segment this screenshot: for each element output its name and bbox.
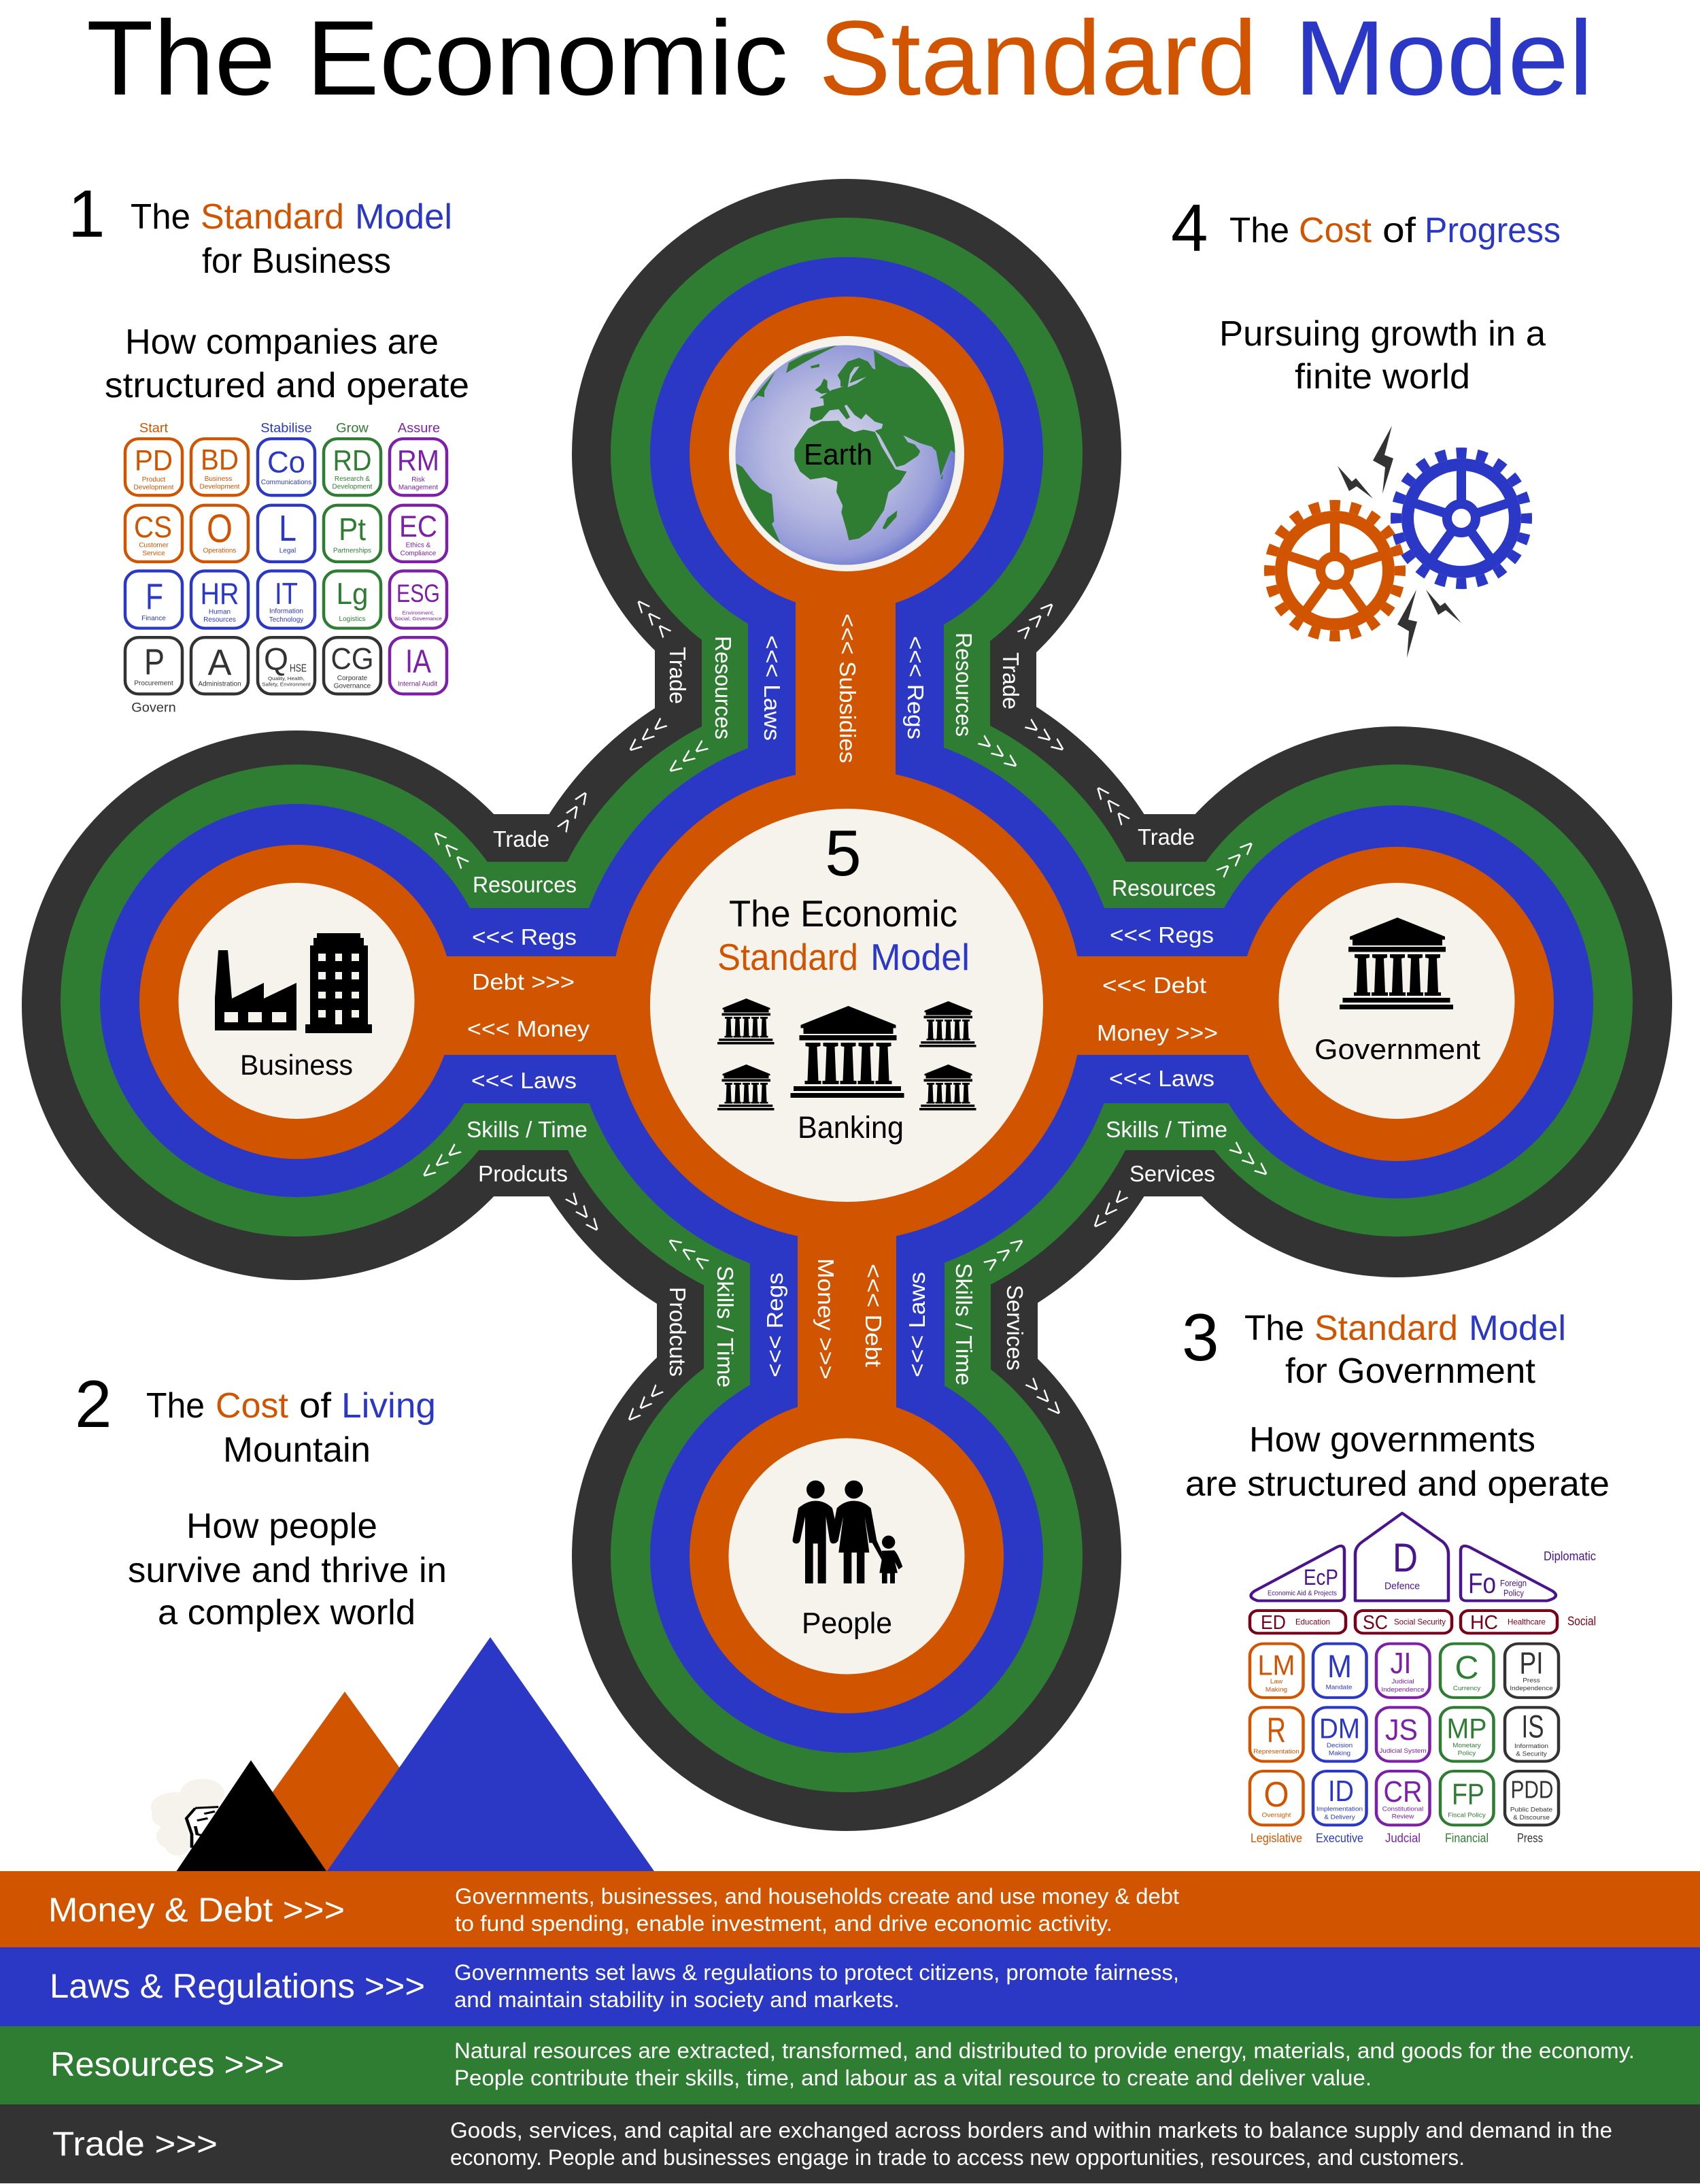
flow labels: right arm: Money >>> <box>1097 1020 1218 1045</box>
panel: business functions grid: A <box>208 641 232 683</box>
panel: government functions house: Financial <box>1445 1831 1489 1845</box>
flow labels: right arm: Skills / Time <box>1106 1117 1227 1142</box>
panel: business functions grid: Social, Governance <box>394 616 443 622</box>
section 2 heading: 2 <box>75 1366 112 1441</box>
node: Banking centre, section 5 <box>717 817 976 1145</box>
section 2 heading: Cost <box>216 1386 289 1426</box>
roof: economic aid <box>1251 1546 1344 1601</box>
icon: climber on cloud <box>151 1779 224 1855</box>
section 1 heading: The <box>131 197 190 237</box>
panel: government functions house: Law <box>1270 1679 1282 1685</box>
flow labels: right arm: >>> <box>1223 1135 1278 1187</box>
roof: defence <box>1355 1513 1448 1601</box>
section 2 heading: of <box>299 1386 332 1426</box>
panel: business functions grid: IA <box>405 643 431 679</box>
section 3 heading: for Government <box>1285 1351 1536 1391</box>
legend bar: trade: Goods, services, and capital are exchanged across borders and within markets to balance supply and demand in the <box>450 2118 1612 2143</box>
node: Earth globe: Earth <box>804 438 872 471</box>
panel: government functions house: Press <box>1523 1677 1540 1684</box>
flow labels: bottom arm: <<< Debt <box>861 1264 886 1367</box>
flow labels: top arm: >>> <box>1011 592 1064 645</box>
panel: government functions house: Legislative <box>1251 1831 1302 1845</box>
panel: business functions grid: Grow <box>336 421 369 435</box>
title <box>86 0 1593 118</box>
panel: business functions grid: Development <box>333 484 373 491</box>
node: Banking centre, section 5: Standard <box>717 936 858 978</box>
panel: business functions grid: O <box>207 507 233 551</box>
panel: business functions grid <box>125 421 447 715</box>
section 1 heading: structured and operate <box>105 366 469 405</box>
legend bar: laws and regulations: Laws & Regulations >>> <box>50 1967 425 2005</box>
section 4 heading: Pursuing growth in a <box>1219 314 1546 354</box>
panel: government functions house: Mandate <box>1326 1684 1352 1691</box>
icon: orange gear <box>1270 505 1400 636</box>
panel: business functions grid: Information <box>269 608 303 615</box>
panel: business functions grid: Logistics <box>339 616 366 623</box>
panel: government functions house: ID <box>1328 1775 1354 1808</box>
node: Government <box>1314 918 1480 1065</box>
panel: government functions house: Currency <box>1453 1685 1481 1692</box>
section 3 heading: are structured and operate <box>1185 1464 1610 1504</box>
panel: business functions grid: Technology <box>269 616 303 624</box>
flow labels: bottom arm: <<< Regs <box>762 1273 787 1377</box>
panel: government functions house: & Security <box>1516 1751 1547 1758</box>
node: Business <box>215 933 372 1081</box>
flow labels: top arm: Trade <box>998 652 1023 709</box>
legend bar: money and debt: Governments, businesses, and households create and use money & debt <box>455 1884 1179 1909</box>
panel: business functions grid: Customer <box>139 542 169 550</box>
flow labels: left arm: Trade <box>493 826 549 852</box>
panel: government functions house: Constitutional <box>1382 1806 1423 1813</box>
section 4 heading <box>1171 190 1561 397</box>
panel: government functions house: & Delivery <box>1324 1814 1355 1821</box>
panel: business functions grid: Communications <box>261 479 311 486</box>
roof: foreign policy <box>1461 1546 1556 1601</box>
section 1 heading: How companies are <box>125 322 439 362</box>
panel: business functions grid: RD <box>333 445 372 477</box>
social row: SC <box>1363 1611 1388 1634</box>
panel: government functions house: Judcial <box>1385 1831 1421 1845</box>
panel: business functions grid: PD <box>135 445 173 477</box>
social row: ED <box>1261 1611 1286 1634</box>
flow labels: left arm: Prodcuts <box>478 1161 568 1186</box>
roof: foreign policy: Fo <box>1468 1568 1496 1599</box>
node: Banking centre, section 5: 5 <box>825 817 862 890</box>
social row: Healthcare <box>1508 1617 1546 1627</box>
panel: business functions grid: F <box>146 575 163 617</box>
flow labels: bottom arm: <<< Laws <box>904 1272 930 1377</box>
panel: government functions house: & Discourse <box>1513 1815 1550 1821</box>
flow labels: left arm: <<< <box>415 1136 469 1186</box>
icon: factory <box>215 950 296 1030</box>
title: The Economic <box>86 0 788 118</box>
panel: business functions grid: ESG <box>396 579 440 607</box>
flow labels: left arm <box>415 783 609 1241</box>
flow labels: right arm: <<< <box>1085 1183 1136 1236</box>
flow labels: right arm: <<< Laws <box>1109 1066 1214 1091</box>
panel: business functions grid: Management <box>398 484 438 492</box>
flow labels: left arm: >>> <box>551 783 598 837</box>
flow labels: top arm: <<< Laws <box>760 635 785 741</box>
section 3 heading: The <box>1244 1309 1304 1348</box>
panel: business functions grid: Partnerships <box>333 548 371 554</box>
section 2 heading: a complex world <box>158 1593 415 1632</box>
section 2 heading: How people <box>186 1507 377 1546</box>
panel: business functions grid: Risk <box>411 476 425 484</box>
section 4 heading: 4 <box>1171 190 1208 265</box>
flow labels: left arm: >>> <box>559 1187 609 1241</box>
section 2 heading <box>75 1366 447 1632</box>
panel: business functions grid: CS <box>134 510 172 544</box>
panel: government functions house: Oversight <box>1262 1812 1291 1819</box>
flow labels: top arm: Resources <box>711 636 736 739</box>
panel: business functions grid: Internal Audit <box>398 681 437 688</box>
node: Government: Government <box>1314 1033 1480 1065</box>
title: Standard <box>819 0 1257 118</box>
section 4 heading: Cost <box>1299 211 1372 250</box>
panel: government functions house: FP <box>1452 1778 1484 1811</box>
flow labels: right arm <box>1085 779 1278 1236</box>
flow labels: top arm: >>> <box>972 728 1027 779</box>
section 1 heading: 1 <box>68 176 105 251</box>
flow labels: top arm: Resources <box>951 633 976 737</box>
panel: government functions house: Press <box>1517 1831 1543 1845</box>
panel: business functions grid: RM <box>397 445 439 477</box>
panel: business functions grid: Service <box>142 550 165 557</box>
flow labels: left arm: <<< Money <box>467 1016 590 1041</box>
icon: family <box>793 1481 902 1583</box>
panel: business functions grid: Research & <box>335 475 371 483</box>
panel: business functions grid: Business <box>205 475 232 483</box>
panel: business functions grid: CG <box>330 641 373 675</box>
diagram: cream node centres <box>178 336 1515 1675</box>
panel: government functions house: LM <box>1257 1650 1295 1681</box>
legend bar: trade <box>0 2104 1700 2183</box>
section 1 heading: for Business <box>202 241 391 281</box>
icon: sparks <box>1338 426 1461 658</box>
panel: government functions house: PI <box>1519 1647 1544 1681</box>
panel: government functions house: Review <box>1392 1813 1414 1820</box>
section 3 heading: How governments <box>1249 1420 1535 1460</box>
section 4 heading: The <box>1229 211 1289 250</box>
section 3 heading <box>1182 1300 1610 1504</box>
section 1 heading: Standard <box>201 197 344 237</box>
legend bar: laws and regulations <box>0 1947 1700 2026</box>
flow labels: top arm: <<< <box>628 592 679 645</box>
panel: business functions grid: Governance <box>334 683 371 690</box>
roof: economic aid: Economic Aid & Projects <box>1268 1590 1337 1597</box>
panel: government functions house: Judicial <box>1391 1679 1414 1685</box>
flow labels: right arm: >>> <box>1210 831 1263 884</box>
node: Business: Business <box>240 1049 353 1081</box>
panel: government functions house: PDD <box>1511 1777 1553 1804</box>
panel: business functions grid: Corporate <box>337 675 368 682</box>
title: Model <box>1294 0 1593 118</box>
icon: bank buildings <box>717 998 976 1110</box>
section 4 heading: finite world <box>1295 357 1470 397</box>
panel: business functions grid: Human <box>209 608 231 616</box>
panel: business functions grid: P <box>144 641 165 682</box>
panel: business functions grid: EC <box>399 509 437 543</box>
flow labels: left arm: <<< <box>425 824 477 877</box>
panel: business functions grid: Quality, Health, <box>268 675 305 682</box>
diagram: resources ring layer <box>61 218 1633 1792</box>
panel: government functions house: Representation <box>1253 1748 1299 1755</box>
panel: government functions house: JS <box>1385 1713 1418 1747</box>
node: Banking centre, section 5: The Economic <box>729 892 957 935</box>
panel: business functions grid: Legal <box>279 548 296 554</box>
flow labels: top arm: <<< Subsidies <box>835 614 860 763</box>
panel: government functions house: C <box>1455 1648 1478 1685</box>
panel: business functions grid: Govern <box>131 701 176 715</box>
icon: office building <box>305 933 372 1033</box>
legend bar: money and debt: Money & Debt >>> <box>48 1891 345 1929</box>
flow labels: bottom arm: <<< <box>619 1377 672 1430</box>
legend bar: trade: Trade >>> <box>52 2125 218 2163</box>
flow labels: top arm: <<< <box>662 732 716 782</box>
section 3 heading: Model <box>1469 1309 1566 1348</box>
panel: business functions grid: BD <box>201 444 239 476</box>
flow labels: bottom arm: Money >>> <box>813 1258 838 1379</box>
legend bar: trade: economy. People and businesses engage in trade to access new opportunities, resources, and customers. <box>450 2145 1465 2170</box>
panel: business functions grid: IT <box>275 577 298 611</box>
flow labels: top arm: <<< Regs <box>903 636 928 739</box>
flow labels: bottom arm <box>619 1228 1071 1430</box>
panel: government functions house: Judicial System <box>1379 1747 1427 1755</box>
section 2 heading: Mountain <box>223 1430 371 1470</box>
panel: business functions grid: L <box>279 507 296 549</box>
panel: business functions grid: HSE <box>290 663 307 674</box>
node: People <box>793 1481 902 1640</box>
panel: government functions house: M <box>1327 1649 1352 1685</box>
panel: government functions house: MP <box>1447 1713 1487 1745</box>
panel: government functions house: Information <box>1514 1743 1548 1750</box>
flow labels: left arm: Resources <box>473 872 577 897</box>
panel: business functions grid: Start <box>139 421 169 435</box>
panel: government functions house: Policy <box>1458 1750 1476 1757</box>
panel: business functions grid: Ethics & <box>406 542 431 550</box>
section 4 heading: of <box>1382 211 1416 250</box>
icon: blue gear <box>1396 453 1527 584</box>
legend bar: resources: People contribute their skills, time, and labour as a vital resource to create and deliver value. <box>454 2066 1372 2090</box>
panel: business functions grid: Pt <box>339 512 366 548</box>
panel: business functions grid: Co <box>267 445 305 479</box>
flow labels: top arm: <<< <box>621 709 675 761</box>
roof: foreign policy: Policy <box>1503 1588 1524 1598</box>
legend bar: resources: Resources >>> <box>50 2045 284 2083</box>
node: Earth globe <box>736 346 955 565</box>
section 2 heading: Living <box>341 1386 436 1426</box>
chart: cost of living mountains <box>151 1637 654 1871</box>
panel: business functions grid: Procurement <box>134 680 173 688</box>
flow labels: right arm: <<< <box>1087 779 1138 833</box>
panel: business functions grid: Compliance <box>401 550 437 557</box>
panel: business functions grid: Finance <box>141 615 166 622</box>
panel: business functions grid: Product <box>142 476 165 484</box>
panel: government functions house: Executive <box>1316 1831 1363 1845</box>
panel: government functions house: JI <box>1391 1647 1412 1679</box>
flow labels: right arm: <<< Debt <box>1102 973 1206 998</box>
social row <box>1250 1611 1596 1634</box>
flow labels: bottom arm: Services <box>1002 1285 1027 1371</box>
panel: government functions house: Fiscal Policy <box>1448 1812 1486 1819</box>
panel: government functions house: Independence <box>1510 1685 1553 1692</box>
social row: Social <box>1567 1614 1596 1628</box>
panel: government functions house: DM <box>1319 1713 1360 1745</box>
diagram: laws and regulations ring layer <box>100 257 1593 1753</box>
panel: government functions house: Implementation <box>1316 1806 1363 1813</box>
panel: business functions grid: Stabilise <box>260 421 312 435</box>
social row: Education <box>1295 1617 1330 1627</box>
section 1 heading: Model <box>355 197 452 237</box>
legend bar: money and debt: to fund spending, enable investment, and drive economic activity. <box>455 1911 1112 1936</box>
flow labels: bottom arm: Prodcuts <box>665 1287 690 1377</box>
flow labels: left arm: Debt >>> <box>472 969 575 994</box>
legend bar: resources <box>0 2026 1700 2104</box>
panel: government functions house <box>1250 1513 1596 1845</box>
panel: business functions grid: Administration <box>198 681 241 688</box>
roof: foreign policy: Foreign <box>1500 1579 1527 1588</box>
social row: HC <box>1470 1611 1498 1634</box>
section 2 heading: The <box>146 1386 205 1426</box>
panel: government functions house: Making <box>1265 1686 1287 1694</box>
section 1 heading <box>68 176 469 405</box>
flow labels: top arm: >>> <box>1019 712 1074 762</box>
panel: government functions house: Diplomatic <box>1544 1549 1596 1564</box>
flow labels: bottom arm: >>> <box>979 1228 1033 1277</box>
flow labels: top arm: Trade <box>665 647 690 704</box>
flow labels: bottom arm: >>> <box>1019 1372 1071 1425</box>
flow labels: bottom arm: Skills / Time <box>713 1266 738 1388</box>
icon: meshing gears with sparks <box>1270 426 1527 658</box>
flow labels: left arm: Skills / Time <box>466 1117 588 1142</box>
icon: government building <box>1340 918 1453 1009</box>
panel: government functions house: Independence <box>1381 1686 1425 1694</box>
panel: business functions grid: Resources <box>203 616 236 624</box>
panel: business functions grid: Safety, Environment <box>262 682 311 688</box>
node: Banking centre, section 5: Model <box>870 936 970 978</box>
roof: economic aid: EcP <box>1304 1566 1338 1590</box>
panel: government functions house: Public Debate <box>1510 1807 1552 1813</box>
panel: government functions house: Decision <box>1327 1742 1353 1749</box>
flow labels: right arm: Services <box>1129 1161 1215 1186</box>
flow labels: bottom arm: <<< <box>662 1229 716 1278</box>
section 3 heading: Standard <box>1314 1309 1458 1348</box>
flow labels: right arm: Resources <box>1112 875 1216 901</box>
panel: government functions house: IS <box>1522 1709 1544 1745</box>
social row: Social Security <box>1394 1617 1446 1627</box>
flow labels: bottom arm: Skills / Time <box>951 1263 976 1385</box>
flow labels: right arm: Trade <box>1138 824 1195 850</box>
panel: government functions house: Making <box>1329 1750 1350 1757</box>
roof: defence: D <box>1393 1535 1418 1581</box>
panel: business functions grid: Environment, <box>402 609 435 616</box>
panel: government functions house: O <box>1263 1775 1289 1815</box>
panel: business functions grid: Operations <box>203 548 237 554</box>
flow labels: right arm: <<< Regs <box>1110 922 1214 947</box>
panel: business functions grid: Development <box>134 484 174 492</box>
diagram: money and debt ring layer <box>139 297 1554 1713</box>
panel: business functions grid: Assure <box>398 421 440 435</box>
panel: business functions grid: Q <box>264 641 288 677</box>
legend bar: resources: Natural resources are extracted, transformed, and distributed to provide energy, materials, and goods for the economy. <box>454 2038 1635 2063</box>
flow labels: left arm: <<< Regs <box>472 924 577 950</box>
panel: business functions grid: HR <box>201 577 239 611</box>
roof: defence: Defence <box>1384 1581 1420 1592</box>
section 2 heading: survive and thrive in <box>128 1551 447 1590</box>
legend bar: money and debt <box>0 1871 1700 1947</box>
panel: government functions house: Monetary <box>1452 1742 1481 1749</box>
node: People: People <box>802 1607 892 1640</box>
diagram: trade ring layer <box>22 179 1672 1831</box>
legend bar: laws and regulations: Governments set laws & regulations to protect citizens, promote fairness, <box>454 1960 1179 1985</box>
flow labels: top arm <box>621 592 1074 782</box>
legend bar: laws and regulations: and maintain stability in society and markets. <box>454 1987 900 2012</box>
section 4 heading: Progress <box>1425 211 1561 250</box>
panel: government functions house: R <box>1267 1710 1286 1750</box>
flow labels: left arm: <<< Laws <box>471 1068 577 1093</box>
panel: government functions house: CR <box>1384 1775 1423 1809</box>
panel: business functions grid: Development <box>200 484 240 491</box>
node: Banking centre, section 5: Banking <box>798 1110 904 1145</box>
section 3 heading: 3 <box>1182 1300 1219 1375</box>
panel: business functions grid: Lg <box>337 577 369 611</box>
